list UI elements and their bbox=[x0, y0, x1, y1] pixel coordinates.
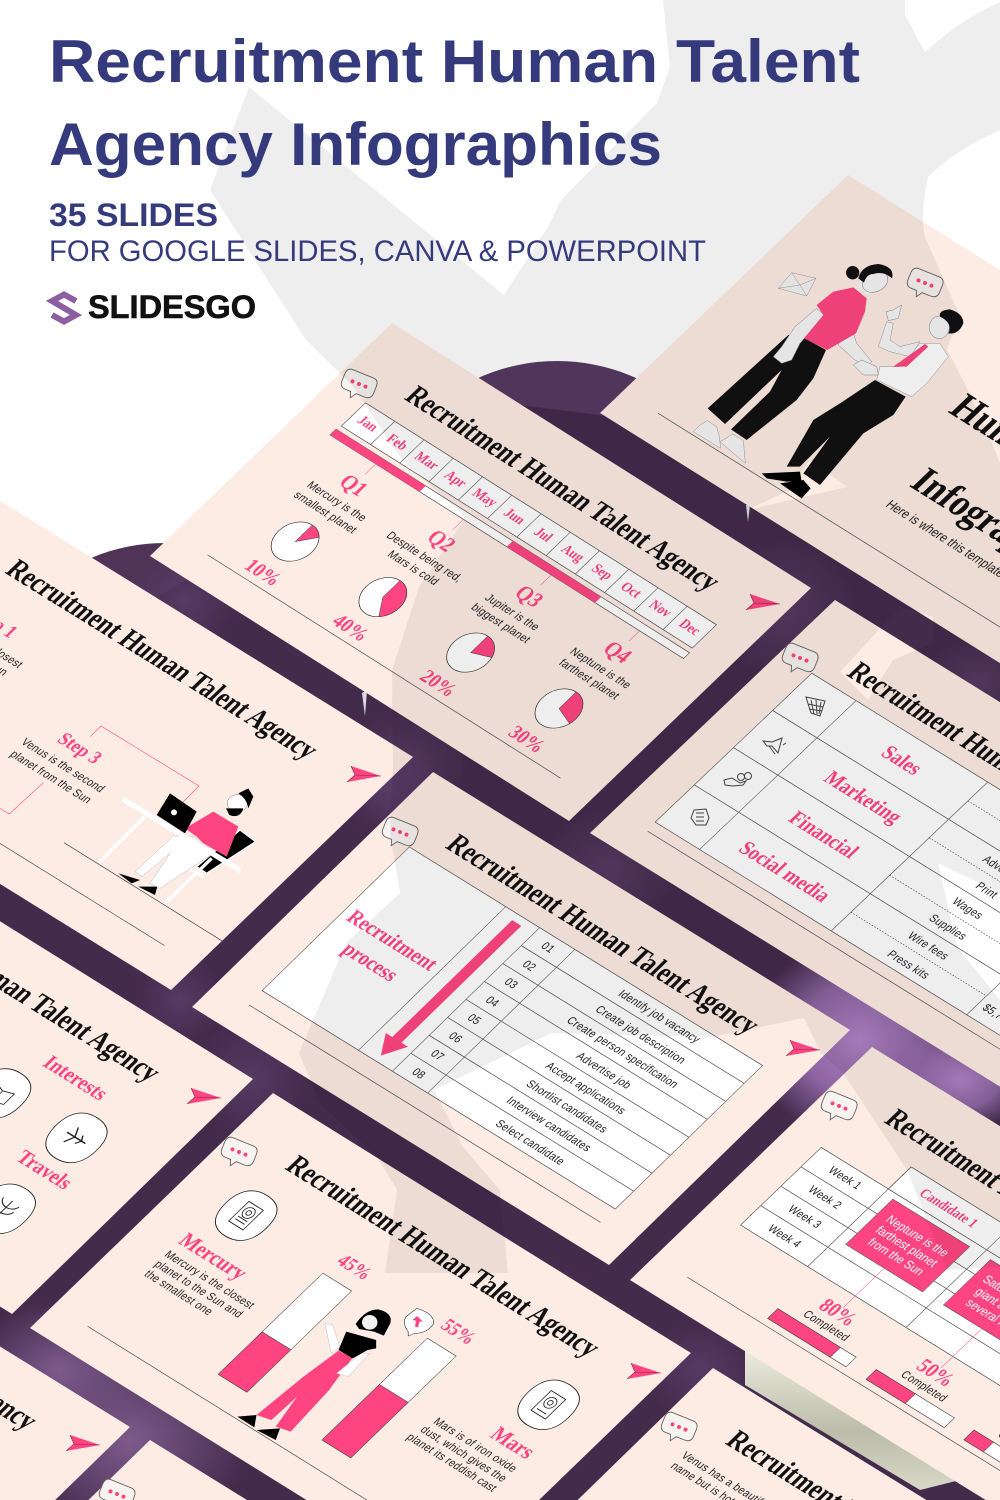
budget items: Supplies bbox=[926, 913, 969, 943]
months row: Feb bbox=[383, 431, 412, 453]
icon: hand with coins bbox=[724, 772, 752, 786]
progress 80% bbox=[768, 1280, 886, 1367]
budget items: Print bbox=[972, 881, 1000, 901]
step numbers: 07 bbox=[428, 1048, 447, 1063]
Q1 column: smallest planet bbox=[291, 489, 360, 537]
slide: recruitment process bbox=[192, 772, 850, 1265]
Q1 column: 10% bbox=[239, 555, 287, 591]
desk and chair bbox=[98, 817, 256, 903]
step labels: Create person specification bbox=[564, 1015, 681, 1091]
Q4 column: 30% bbox=[503, 722, 550, 757]
slide: budget table bbox=[590, 600, 1000, 1091]
slide: candidates schedule bbox=[630, 1047, 1000, 1500]
connector lines bbox=[0, 726, 199, 814]
candidate headers: Candidate 1 bbox=[916, 1186, 982, 1230]
travels label: Travels bbox=[11, 1147, 77, 1194]
months row: Jul bbox=[531, 524, 556, 545]
pink card 1: farthest planet bbox=[872, 1223, 942, 1270]
Q3 column: biggest planet bbox=[468, 602, 534, 646]
bar 55%: 55% bbox=[436, 1315, 481, 1349]
mars text: dust, which gives the bbox=[417, 1424, 510, 1485]
mercury text: planet to the Sun and bbox=[151, 1259, 245, 1320]
process table bbox=[262, 847, 763, 1209]
budget grid bbox=[655, 673, 1000, 1041]
step labels: Create job description bbox=[592, 1004, 688, 1067]
mercury text: the smallest one bbox=[141, 1268, 215, 1318]
mercury text: Mercury bbox=[173, 1228, 254, 1285]
icon: plane bbox=[35, 1105, 117, 1171]
icon: social robot bbox=[691, 809, 709, 825]
step numbers: 04 bbox=[482, 995, 502, 1010]
category labels: Marketing bbox=[818, 767, 908, 828]
illustration: woman presenting bbox=[237, 1308, 434, 1440]
Q2 column: 40% bbox=[327, 610, 374, 646]
step numbers: 03 bbox=[501, 976, 520, 991]
cover heading bbox=[878, 387, 1000, 591]
shirt bbox=[339, 1332, 376, 1358]
week labels bbox=[765, 1165, 864, 1250]
months row: Mar bbox=[411, 449, 443, 473]
step 3: Venus is the second bbox=[18, 736, 107, 795]
slide: bottom left bbox=[0, 1169, 130, 1500]
months row: Apr bbox=[441, 468, 471, 490]
icon: book bbox=[0, 1061, 41, 1126]
man bbox=[762, 305, 963, 498]
slide title: Recruitment Human Talent Agency bbox=[279, 1150, 607, 1363]
months row: Dec bbox=[676, 616, 704, 638]
Q4 column: farthest planet bbox=[556, 657, 622, 702]
envelope bbox=[778, 273, 816, 296]
step labels: Interview candidates bbox=[503, 1095, 594, 1154]
progress 50% bbox=[866, 1341, 984, 1428]
slide title: Recruitment Human Talent Agency bbox=[0, 554, 325, 765]
paper planes bbox=[66, 594, 820, 1451]
purple background shapes bbox=[0, 361, 1000, 1500]
months row: Nov bbox=[646, 597, 676, 620]
illustration: woman and man handshake bbox=[693, 264, 963, 498]
pink card 1: Neptune is the bbox=[883, 1213, 953, 1260]
pink card 2 bbox=[943, 1260, 1000, 1352]
Q2 column: Despite being red, bbox=[383, 530, 465, 585]
Q2 column: Mars is cold bbox=[384, 549, 441, 588]
progress 80%: Completed bbox=[800, 1309, 852, 1344]
Q1 column: Q1 bbox=[334, 470, 374, 501]
week labels: Week 3 bbox=[785, 1203, 824, 1231]
week labels: Week 2 bbox=[805, 1184, 844, 1212]
mars text: Mars bbox=[485, 1422, 541, 1463]
icon: shopping cart bbox=[806, 697, 825, 716]
bar 45%: 45% bbox=[332, 1251, 377, 1285]
months row: Oct bbox=[617, 579, 646, 601]
header title: Recruitment Human Talent bbox=[49, 28, 860, 95]
illustration: man at laptop bbox=[0, 726, 256, 942]
woman bbox=[693, 264, 892, 463]
Q3 column bbox=[402, 570, 567, 710]
pink card 1 bbox=[846, 1199, 970, 1292]
slide: venus bbox=[472, 1368, 1000, 1500]
slide: quarterly chart bbox=[150, 323, 811, 821]
step labels: Identify job vacancy bbox=[615, 988, 703, 1046]
platforms subtitle: FOR GOOGLE SLIDES, CANVA & POWERPOINT bbox=[49, 235, 706, 268]
slide title: Recruitment Human Talent Agency bbox=[398, 381, 727, 597]
mars text: planet its reddish cast bbox=[403, 1432, 500, 1495]
gray silhouette overlay bbox=[210, 0, 1000, 1273]
logo icon bbox=[52, 294, 76, 322]
step 3: Step 3 bbox=[52, 729, 107, 768]
slide: bars with planets bbox=[30, 1093, 691, 1500]
step labels: Advertise job bbox=[573, 1051, 634, 1092]
Q1 column: Mercury is the bbox=[304, 480, 369, 524]
progress 80%: 80% bbox=[813, 1295, 862, 1331]
Q1 column bbox=[224, 457, 393, 600]
timeline bar bbox=[319, 429, 690, 669]
slide: interests bbox=[0, 819, 253, 1314]
step labels: Accept applications bbox=[542, 1060, 629, 1117]
step 3: planet from the Sun bbox=[7, 749, 94, 806]
icon: mars document bbox=[507, 1372, 590, 1438]
icon: plant bbox=[0, 1176, 46, 1242]
mars text: Mars is of iron oxide bbox=[430, 1416, 520, 1475]
step numbers: 08 bbox=[409, 1066, 428, 1082]
budget items: Wages bbox=[949, 896, 986, 922]
Q4 column bbox=[489, 625, 656, 766]
arms bbox=[325, 1323, 370, 1377]
Q3 column: 20% bbox=[415, 666, 462, 701]
Q4 column: Neptune is the bbox=[567, 646, 634, 691]
arrow bubble bbox=[404, 1308, 434, 1336]
desk top bbox=[123, 799, 241, 871]
budget items: Press kits bbox=[884, 949, 932, 982]
laptop bbox=[157, 793, 197, 833]
down arrow bbox=[370, 916, 528, 1062]
interests label: Interests bbox=[38, 1052, 113, 1105]
step labels bbox=[471, 979, 718, 1181]
category labels: Financial bbox=[783, 808, 863, 863]
step labels: Shortlist candidates bbox=[523, 1078, 610, 1136]
header title: Agency Infographics bbox=[49, 111, 662, 178]
months row: Aug bbox=[558, 541, 588, 565]
pants bbox=[256, 1351, 353, 1432]
months row: May bbox=[469, 485, 501, 510]
slide title: Recruitment Human Talent Agency bbox=[439, 829, 767, 1040]
process heading: process bbox=[337, 939, 403, 986]
step 3 bbox=[6, 716, 128, 807]
Q3 column: Jupiter is the bbox=[482, 592, 542, 633]
budget items bbox=[881, 817, 1000, 983]
slide: title cover bbox=[600, 175, 1000, 675]
process heading: Recruitment bbox=[341, 906, 443, 975]
head and hair bbox=[356, 1309, 391, 1336]
icon: megaphone bbox=[763, 738, 786, 754]
schedule table bbox=[741, 1125, 1000, 1449]
step 1 bbox=[0, 588, 46, 681]
months row: Sep bbox=[588, 561, 617, 583]
progress 50%: Completed bbox=[898, 1369, 950, 1404]
slide: bottom centre bbox=[0, 1440, 567, 1500]
Q4 column: Q4 bbox=[598, 636, 638, 668]
budget items: Wire fees bbox=[904, 930, 951, 963]
slide: steps bbox=[0, 497, 413, 990]
header title bbox=[49, 28, 860, 178]
bar 45% bbox=[218, 1250, 377, 1393]
months row: Jan bbox=[354, 413, 382, 434]
months row bbox=[341, 403, 716, 648]
icon: mercury document bbox=[205, 1183, 287, 1248]
category labels: Sales bbox=[876, 742, 927, 780]
step labels: Select candidate bbox=[492, 1118, 567, 1168]
mercury text bbox=[141, 1228, 279, 1332]
months row: Jun bbox=[500, 505, 529, 527]
step numbers: 05 bbox=[464, 1012, 484, 1027]
progress 50%: 50% bbox=[911, 1355, 960, 1391]
speech bubbles bbox=[95, 266, 945, 1500]
step numbers: 02 bbox=[519, 959, 538, 974]
step numbers bbox=[409, 940, 557, 1082]
category labels: Social media bbox=[733, 838, 835, 907]
pink card 1: from the Sun bbox=[864, 1235, 928, 1278]
bar 55% bbox=[322, 1315, 481, 1458]
progress third bbox=[964, 1418, 1000, 1488]
process heading bbox=[319, 906, 443, 997]
Q2 column: Q2 bbox=[422, 525, 461, 556]
Q3 column: Q3 bbox=[509, 581, 549, 612]
shoes bbox=[237, 1415, 280, 1440]
slide count: 35 SLIDES bbox=[49, 197, 218, 233]
step numbers: 06 bbox=[446, 1030, 465, 1046]
logo wordmark: SLIDESGO bbox=[88, 289, 256, 325]
mercury text: Mercury is the closest bbox=[161, 1249, 258, 1312]
week labels: Week 1 bbox=[825, 1165, 864, 1192]
step numbers: 01 bbox=[538, 940, 557, 956]
seated man bbox=[118, 788, 253, 895]
category labels bbox=[733, 726, 953, 907]
Q2 column bbox=[306, 509, 487, 659]
week labels: Week 4 bbox=[765, 1223, 804, 1250]
mars text bbox=[403, 1391, 541, 1495]
